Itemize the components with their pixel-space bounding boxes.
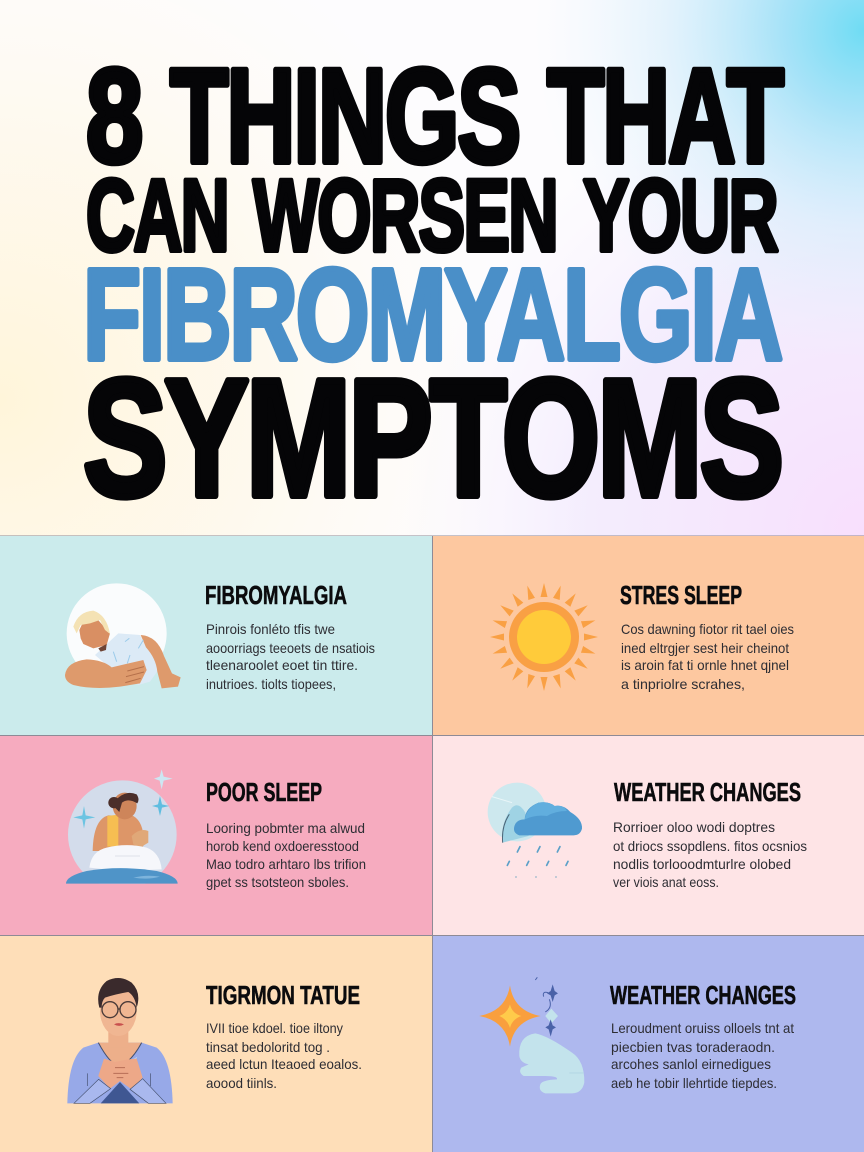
panel: weather changes second: [433, 936, 864, 1152]
text block: Cos dawning fiotor rit tael oies: [621, 621, 794, 637]
text block: piecbien tvas toraderaodn.: [611, 1039, 775, 1055]
text block: horob kend oxdoeresstood: [206, 838, 359, 854]
text block: aooorriags teeoets de nsatiois: [206, 640, 375, 656]
title: WORSEN: [253, 158, 557, 272]
panel: weather changes: [433, 736, 864, 935]
text block: Leroudment oruiss olloels tnt at: [611, 1020, 794, 1036]
text block: aoood tiinls.: [206, 1075, 277, 1091]
heading: POOR SLEEP: [206, 777, 322, 807]
title: CAN: [86, 158, 228, 272]
heading: STRES SLEEP: [620, 580, 742, 610]
text block: Mao todro arhtaro lbs trifion: [206, 856, 366, 872]
text block: [206, 1020, 362, 1091]
icon: person with glasses and folded hands: [67, 978, 173, 1103]
text block: [206, 820, 366, 890]
text block: ver viois anat eoss.: [613, 874, 719, 890]
text block: gpet ss tsotsteon sboles.: [206, 874, 349, 890]
panel: tigrmon tatue: [0, 936, 432, 1152]
text block: tinsat bedoloritd tog .: [206, 1039, 330, 1055]
text block: [613, 819, 807, 890]
title: 8: [86, 42, 141, 191]
text block: [206, 621, 375, 692]
text block: a tinpriolre scrahes,: [621, 676, 745, 692]
text block: nodlis torlooodmturlre olobed: [613, 856, 791, 872]
text block: Looring pobmter ma alwud: [206, 820, 365, 836]
text block: [611, 1020, 794, 1091]
icon: sun: [490, 583, 598, 691]
icon: rain cloud: [488, 783, 582, 878]
title: [83, 42, 783, 532]
text block: [621, 621, 794, 692]
title: THINGS: [170, 42, 519, 191]
panel: fibromyalgia: [0, 536, 432, 735]
icon: person awake in bed: [63, 769, 180, 890]
text block: Rorrioer oloo wodi doptres: [613, 819, 775, 835]
text block: aeb he tobir llehrtide tiepdes.: [611, 1075, 777, 1091]
panel: poor sleep: [0, 736, 432, 935]
text block: IVII tioe kdoel. tioe iltony: [206, 1020, 343, 1036]
text block: arcohes sanlol eirnedigues: [611, 1056, 771, 1072]
heading: FIBROMYALGIA: [205, 580, 347, 610]
text block: aeed lctun Iteaoed eoalos.: [206, 1056, 362, 1072]
text block: inutrioes. tiolts tiopees,: [206, 676, 336, 692]
text block: ot driocs ssopdlens. fitos ocsnios: [613, 838, 807, 854]
panel: stress sleep: [433, 536, 864, 735]
icon: person holding aching shoulder: [65, 583, 181, 688]
text block: Pinrois fonléto tfis twe: [206, 621, 335, 637]
title: YOUR: [583, 158, 778, 272]
text block: tleenaroolet eoet tin ttire.: [206, 657, 358, 673]
text block: ined eltrgjer sest heir cheinot: [621, 640, 789, 656]
text block: is aroin fat ti ornle hnet qjnel: [621, 657, 789, 673]
icon: star and cloud: [479, 977, 584, 1093]
header background: [0, 0, 864, 536]
heading: TIGRMON TATUE: [206, 980, 360, 1010]
